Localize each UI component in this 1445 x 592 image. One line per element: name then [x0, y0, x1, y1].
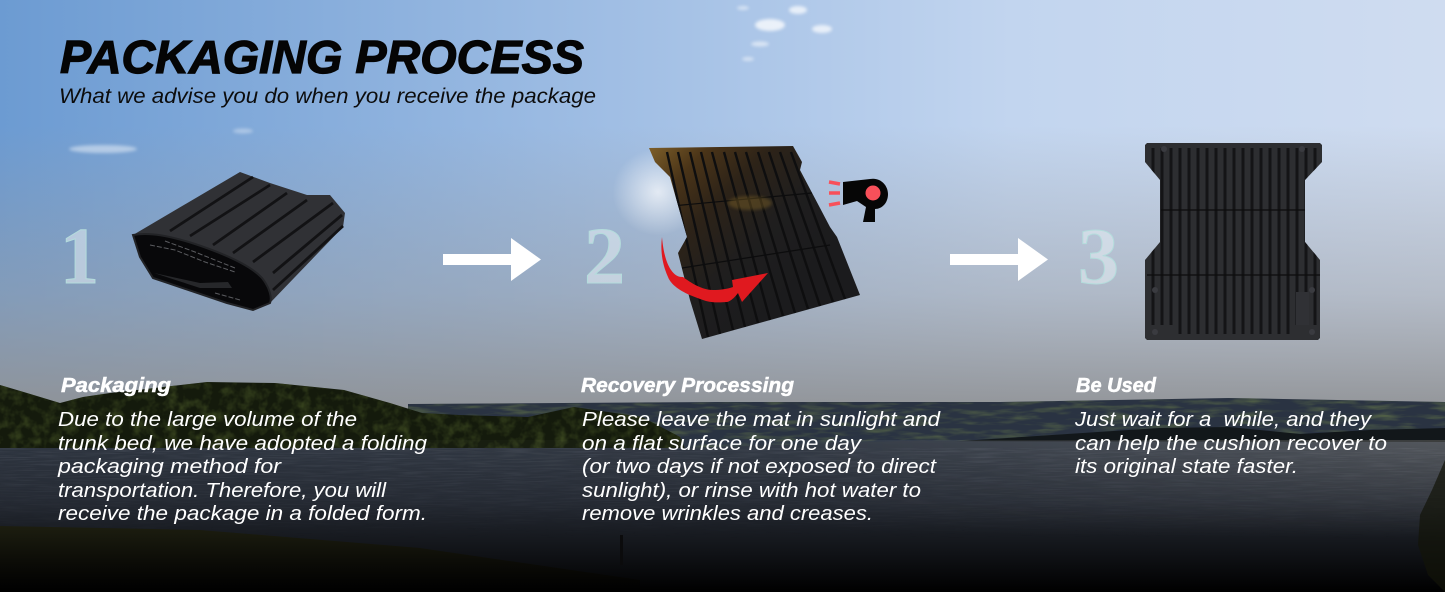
text block: recovery processing: (or two days if not exposed to direct [582, 455, 937, 478]
text block: recovery processing [581, 374, 941, 525]
image: unfolding mat [649, 146, 860, 339]
text block: recovery processing: on a flat surface for one day [582, 432, 863, 455]
icon: red curved arrow [661, 237, 768, 302]
subtitle: What we advise you do when you receive the package [59, 85, 596, 108]
text block: recovery processing: Recovery Processing [581, 374, 794, 397]
text block: be used: Be Used [1076, 374, 1156, 397]
text block: be used: Just wait for a while, and they [1074, 408, 1373, 431]
arrow: step 1 to 2 [443, 238, 541, 281]
title: PACKAGING PROCESS [60, 31, 584, 83]
text block: packaging: transportation. Therefore, you will [58, 479, 388, 502]
text block: packaging: receive the package in a folded form. [58, 502, 427, 525]
text block: be used: can help the cushion recover to [1075, 432, 1387, 455]
text block: packaging: packaging method for [57, 455, 282, 478]
text block: packaging: Due to the large volume of the [58, 408, 357, 431]
text block: be used: its original state faster. [1075, 455, 1298, 478]
arrow: step 2 to 3 [950, 238, 1048, 281]
text block: recovery processing: sunlight), or rinse with hot water to [582, 479, 921, 502]
image: flat mat [1145, 143, 1322, 340]
text block: packaging [57, 374, 428, 525]
step number 3: 3 [1078, 213, 1119, 301]
text block: packaging: trunk bed, we have adopted a folding [58, 432, 428, 455]
text block: be used [1074, 374, 1387, 478]
image: folded mat [133, 172, 345, 310]
icon: hair dryer [829, 179, 888, 222]
text block: packaging: Packaging [61, 374, 172, 397]
text block: recovery processing: remove wrinkles and creases. [582, 502, 873, 525]
glow behind mat [612, 148, 704, 236]
step number 1: 1 [60, 213, 99, 301]
step number 2: 2 [584, 213, 625, 301]
text block: recovery processing: Please leave the mat in sunlight and [582, 408, 941, 431]
